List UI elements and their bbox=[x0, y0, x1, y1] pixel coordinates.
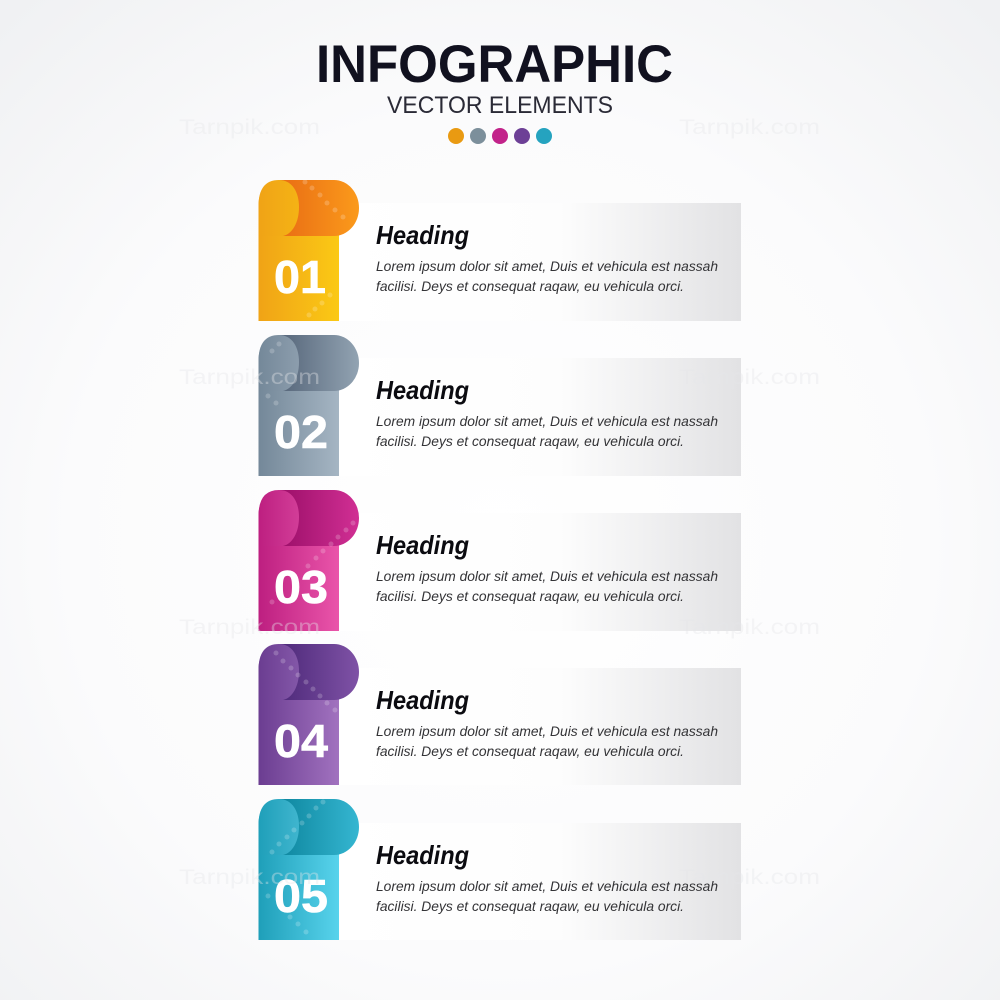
watermark dots bbox=[302, 180, 346, 318]
text background bbox=[339, 513, 741, 631]
text background bbox=[339, 823, 741, 940]
watermarks: Tarnpik.com bbox=[679, 616, 820, 639]
watermark dots bbox=[274, 650, 338, 712]
panel: step 05 bbox=[258, 799, 741, 940]
body text line 2: facilisi. Deys et consequat raqaw, eu vehicula orci. bbox=[376, 278, 684, 294]
panel: step 01 bbox=[258, 180, 741, 321]
ribbon curl bbox=[280, 644, 359, 700]
watermarks bbox=[179, 116, 820, 889]
watermarks: Tarnpik.com bbox=[679, 366, 820, 389]
ribbon curl bbox=[280, 799, 359, 855]
watermark dots bbox=[266, 800, 326, 934]
body text line 2: facilisi. Deys et consequat raqaw, eu vehicula orci. bbox=[376, 588, 684, 604]
ribbon curl bbox=[280, 180, 359, 236]
panel: step 03 bbox=[258, 490, 741, 631]
body text line 2: facilisi. Deys et consequat raqaw, eu vehicula orci. bbox=[376, 898, 684, 914]
ribbon body bbox=[258, 799, 339, 940]
number: 05 bbox=[274, 870, 328, 922]
subtitle: VECTOR ELEMENTS bbox=[387, 92, 613, 119]
heading: Heading bbox=[376, 220, 469, 250]
body text line 2: facilisi. Deys et consequat raqaw, eu vehicula orci. bbox=[376, 433, 684, 449]
title: INFOGRAPHIC bbox=[316, 35, 673, 94]
watermarks: Tarnpik.com bbox=[179, 866, 320, 889]
ribbon body bbox=[258, 335, 339, 476]
body text line 2: facilisi. Deys et consequat raqaw, eu vehicula orci. bbox=[376, 743, 684, 759]
ribbon fold bbox=[258, 180, 299, 236]
heading: Heading bbox=[376, 685, 469, 715]
body text: Lorem ipsum dolor sit amet, Duis et vehicula est nassah bbox=[376, 723, 718, 739]
heading: Heading bbox=[376, 840, 469, 870]
watermarks: Tarnpik.com bbox=[179, 116, 320, 139]
watermark dots bbox=[270, 520, 356, 604]
number: 03 bbox=[274, 561, 328, 613]
panel: step 02 bbox=[258, 335, 741, 476]
number: 02 bbox=[274, 406, 328, 458]
text background bbox=[339, 668, 741, 785]
ribbon fold bbox=[258, 644, 299, 700]
ribbon curl bbox=[280, 490, 359, 546]
watermarks: Tarnpik.com bbox=[179, 366, 320, 389]
heading: Heading bbox=[376, 530, 469, 560]
ribbon body bbox=[258, 490, 339, 631]
text background bbox=[339, 203, 741, 321]
watermarks: Tarnpik.com bbox=[679, 116, 820, 139]
ribbon fold bbox=[258, 490, 299, 546]
number: 01 bbox=[274, 251, 326, 303]
watermarks: Tarnpik.com bbox=[179, 616, 320, 639]
ribbon curl bbox=[280, 335, 359, 391]
text background bbox=[339, 358, 741, 476]
body text: Lorem ipsum dolor sit amet, Duis et vehicula est nassah bbox=[376, 568, 718, 584]
panel: step 04 bbox=[258, 644, 741, 785]
heading: Heading bbox=[376, 375, 469, 405]
ribbon body bbox=[258, 180, 339, 321]
body text: Lorem ipsum dolor sit amet, Duis et vehicula est nassah bbox=[376, 258, 718, 274]
ribbon body bbox=[258, 644, 339, 785]
number: 04 bbox=[274, 715, 328, 767]
watermarks: Tarnpik.com bbox=[679, 866, 820, 889]
ribbon fold bbox=[258, 335, 299, 391]
watermark dots bbox=[266, 342, 282, 406]
ribbon fold bbox=[258, 799, 299, 855]
body text: Lorem ipsum dolor sit amet, Duis et vehicula est nassah bbox=[376, 413, 718, 429]
colour dots bbox=[448, 128, 552, 144]
body text: Lorem ipsum dolor sit amet, Duis et vehicula est nassah bbox=[376, 878, 718, 894]
